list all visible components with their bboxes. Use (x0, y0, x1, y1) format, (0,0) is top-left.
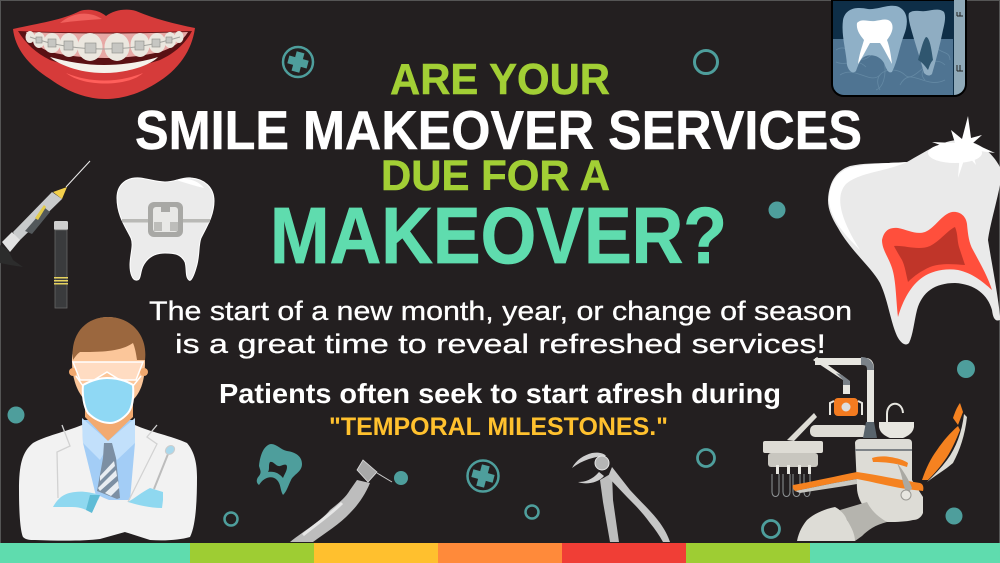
footer colour band (0, 543, 1000, 563)
icon: small ring bottom (526, 506, 538, 518)
instrument tray (763, 441, 823, 453)
gloved hands (53, 492, 100, 513)
sink (879, 422, 914, 438)
seat (793, 472, 923, 491)
icon: ring lower left (224, 512, 238, 526)
mask (83, 378, 133, 423)
icon: teal tooth (257, 444, 302, 495)
illustration: lips with braces (13, 10, 195, 99)
illustration: dental extraction forceps (572, 453, 670, 542)
backrest (922, 426, 960, 480)
icon: ring near pliers (698, 450, 714, 466)
crossed arm (92, 496, 190, 537)
illustration: dental x-ray (832, 0, 966, 96)
lamp arm (815, 358, 874, 422)
body text (149, 296, 852, 359)
icon: dental cross bottom (468, 460, 498, 492)
body text: The start of a new month, year, or change of season (149, 296, 852, 326)
illustration: anesthetic cartridge (54, 221, 68, 308)
icon: dot by handpiece (394, 471, 408, 485)
highlighted text: "TEMPORAL MILESTONES." (329, 413, 668, 441)
goggles (73, 362, 143, 380)
lamp (834, 398, 858, 416)
collar (82, 418, 135, 460)
chair base (855, 439, 923, 522)
illustration: dentist (19, 317, 197, 541)
illustration: tooth with bracket (117, 178, 214, 280)
heading line: smile makeover services: SMILE MAKEOVER SERVICES (135, 99, 862, 161)
icon: ring top (694, 50, 718, 74)
lapels (57, 425, 157, 502)
illustration: handpiece drill (290, 460, 392, 542)
dental mirror (154, 454, 168, 489)
shirt (82, 420, 135, 500)
illustration: dental chair (763, 357, 967, 541)
icon: dot near chair (946, 508, 962, 524)
icon: dot right of headline (768, 202, 786, 218)
necktie (97, 443, 120, 499)
illustration: syringe (0, 161, 90, 267)
lab coat (19, 425, 197, 541)
heading line: due for a: DUE FOR A (381, 152, 610, 200)
heading line: are your: ARE YOUR (390, 55, 610, 104)
pulp chamber (882, 212, 992, 317)
icon: dot left (8, 406, 24, 424)
icon: sparkle (932, 116, 995, 178)
body text: is a great time to reveal refreshed services! (175, 329, 826, 359)
subheading text: Patients often seek to start afresh during (219, 378, 781, 409)
illustration: big tooth with pulp (828, 116, 1000, 344)
icon: ring near chair (762, 520, 780, 538)
icon: dental cross top (283, 47, 313, 77)
hair (73, 317, 145, 360)
neck (85, 400, 133, 441)
heading line: makeover: MAKEOVER? (270, 191, 727, 280)
head (72, 317, 145, 412)
icon: dot right (957, 360, 975, 378)
